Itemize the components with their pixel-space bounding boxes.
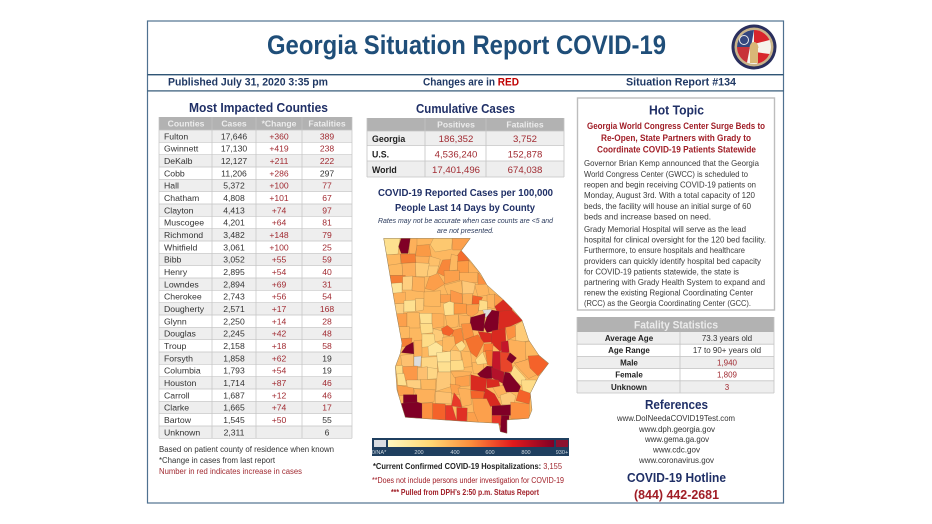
- heading: map title: [378, 187, 553, 214]
- hospitalizations note: *Current Confirmed COVID-19 Hospitalizations: 3,155: [373, 461, 562, 471]
- row: U.S.: [372, 150, 542, 160]
- row: World: 674,038: [508, 165, 542, 176]
- hot topic paragraph 1: Governor Brian Kemp announced that the Georgia: [584, 159, 759, 168]
- hotline: COVID-19 Hotline: [627, 471, 726, 485]
- row: Clarke: [164, 403, 332, 413]
- row: Dougherty: +17: [272, 304, 287, 314]
- row: Houston: Houston: [164, 378, 197, 388]
- row: Gwinnett: [164, 144, 334, 154]
- report number: Situation Report #134: [626, 76, 737, 88]
- row: Clarke: +74: [272, 403, 287, 413]
- row: female: [615, 371, 738, 380]
- row: DeKalb: DeKalb: [164, 156, 193, 166]
- row: unknown: Unknown: [611, 383, 647, 392]
- row: Whitfield: +100: [269, 242, 289, 252]
- row: Gwinnett: 17,130: [221, 144, 247, 154]
- row: Forsyth: Forsyth: [164, 353, 193, 363]
- row: Whitfield: Whitfield: [164, 242, 197, 252]
- row: Clarke: 1,665: [223, 403, 245, 413]
- heading: most impacted counties: Most Impacted Counties: [189, 100, 328, 115]
- hotline: (844) 442-2681: [634, 488, 719, 502]
- row: Unknown: 6: [325, 427, 330, 437]
- row: Cherokee: 54: [322, 292, 332, 302]
- row: Cobb: 297: [320, 168, 334, 178]
- row: Dougherty: 168: [320, 304, 334, 314]
- row: DeKalb: 12,127: [221, 156, 247, 166]
- row: Lowndes: 31: [322, 279, 332, 289]
- row: Bartow: Bartow: [164, 415, 192, 425]
- references list: www.DoINeedaCOVID19Test.com: [616, 414, 735, 423]
- row: Troup: [164, 341, 332, 351]
- hot topic headline: Re-Open, State Partners with Grady to: [601, 133, 752, 143]
- table: cumulative cases: Positives: [437, 120, 475, 130]
- row: Bibb: [164, 255, 332, 265]
- hot topic paragraph 2: Furthermore, to ensure hospitals and healthcare: [584, 246, 745, 255]
- row: Gwinnett: +419: [269, 144, 289, 154]
- row: Hall: 77: [322, 181, 332, 191]
- row: Hall: Hall: [164, 181, 179, 191]
- row: Columbia: 1,793: [223, 366, 245, 376]
- row: Henry: [164, 267, 332, 277]
- row: Fulton: Fulton: [164, 131, 188, 141]
- row: Chatham: Chatham: [164, 193, 199, 203]
- icon: state seal: [732, 24, 776, 70]
- row: Cherokee: Cherokee: [164, 292, 202, 302]
- hot topic paragraph 2: providers can quickly identify hospital bed capacity: [584, 257, 762, 266]
- row: DeKalb: +211: [270, 156, 289, 166]
- row: Cherokee: [164, 292, 332, 302]
- hot topic paragraph 2: Grady Memorial Hospital will serve as the lead: [584, 225, 746, 234]
- row: male: Male: [620, 358, 638, 367]
- hot topic paragraph 1: World Congress Center (GWCC) is scheduled to: [584, 170, 748, 179]
- row: Glynn: 2,250: [223, 316, 245, 326]
- row: age range: Age Range: [608, 346, 650, 355]
- hospitalizations note: [372, 461, 564, 497]
- table header: *Change: [262, 118, 297, 128]
- row: Georgia: 186,352: [439, 134, 473, 145]
- panel: hot topic: [578, 98, 774, 310]
- row: Unknown: Unknown: [164, 427, 200, 437]
- row: average age: 73.3 years old: [702, 334, 752, 343]
- row: Clayton: 4,413: [223, 205, 245, 215]
- row: Hall: 5,372: [223, 181, 245, 191]
- table: fatality statistics: [577, 317, 774, 393]
- heading: map title: People Last 14 Days by County: [395, 202, 535, 214]
- row: Carroll: +12: [272, 390, 287, 400]
- row: Fulton: [164, 131, 334, 141]
- row: Houston: +87: [272, 378, 287, 388]
- row: age range: 17 to 90+ years old: [693, 346, 761, 355]
- row: Troup: 58: [322, 341, 332, 351]
- row: Lowndes: 2,894: [223, 279, 245, 289]
- row: Chatham: 4,808: [223, 193, 245, 203]
- map caveat note: [378, 216, 554, 235]
- hot topic paragraph 2: hospital for clinical oversight for the 120 bed facility.: [584, 236, 766, 244]
- row: DeKalb: 222: [320, 156, 334, 166]
- table: cumulative cases: Fatalities: [506, 120, 544, 130]
- heading: references: References: [645, 397, 708, 412]
- row: Chatham: 67: [322, 193, 332, 203]
- row: male: 1,940: [717, 358, 738, 367]
- row: Fulton: +360: [269, 131, 289, 141]
- row: female: Female: [615, 371, 643, 380]
- hot topic paragraph 2: (RCC) as the Georgia Coordinating Center (GCC).: [584, 299, 751, 308]
- row: Forsyth: 1,858: [223, 353, 245, 363]
- row: Houston: [164, 378, 332, 388]
- hot topic paragraph 2: [584, 225, 766, 308]
- references list: www.dph.georgia.gov: [638, 425, 715, 434]
- map legend: 930+: [556, 450, 568, 456]
- map legend: 200: [414, 450, 424, 456]
- row: Muscogee: 4,201: [223, 218, 245, 228]
- hot topic paragraph 2: partnering with Grady Health System to expand and: [584, 278, 765, 287]
- hospitalizations note: **Does not include persons under investigation for COVID-19: [372, 476, 564, 485]
- row: Richmond: 79: [322, 230, 332, 240]
- references list: www.coronavirus.gov: [638, 456, 714, 465]
- heading: cumulative cases: Cumulative Cases: [416, 101, 515, 116]
- row: Richmond: [164, 230, 332, 240]
- row: male: [620, 358, 738, 367]
- row: U.S.: 152,878: [508, 150, 542, 160]
- row: Douglas: [164, 329, 332, 339]
- hot topic paragraph 2: for COVID-19 patients statewide, the state is: [584, 268, 739, 276]
- dark county: Whitfield area: [399, 237, 410, 253]
- row: Fulton: 17,646: [221, 131, 247, 141]
- row: Richmond: +148: [269, 230, 289, 240]
- row: Henry: Henry: [164, 267, 188, 277]
- row: Muscogee: 81: [322, 218, 332, 228]
- row: Clayton: +74: [272, 205, 287, 215]
- row: Gwinnett: 238: [320, 144, 334, 154]
- title: Georgia Situation Report COVID-19: [267, 30, 666, 60]
- row: Bartow: [164, 415, 332, 425]
- row: Whitfield: 25: [322, 242, 332, 252]
- row: unknown: 3: [725, 383, 730, 392]
- hospitalizations note: *** Pulled from DPH’s 2:50 p.m. Status Report: [391, 488, 539, 497]
- footnotes: county table: [159, 445, 334, 476]
- row: female: 1,809: [717, 371, 738, 380]
- row: Bibb: Bibb: [164, 255, 182, 265]
- row: Fulton: 389: [320, 131, 334, 141]
- row: Richmond: 3,482: [223, 230, 245, 240]
- row: Bartow: +50: [272, 415, 287, 425]
- row: Hall: +100: [269, 181, 289, 191]
- row: Georgia: Georgia: [372, 134, 405, 144]
- row: Cobb: [164, 168, 334, 178]
- map legend: 600: [485, 450, 495, 456]
- row: Lowndes: +69: [272, 279, 287, 289]
- row: Bibb: 59: [322, 255, 332, 265]
- table header: Counties: [168, 118, 205, 128]
- row: average age: [605, 334, 752, 343]
- row: Henry: 40: [322, 267, 332, 277]
- row: age range: [608, 346, 761, 355]
- row: Glynn: 28: [322, 316, 332, 326]
- table header: [168, 118, 346, 128]
- row: Lowndes: [164, 279, 332, 289]
- map legend: 800: [521, 450, 531, 456]
- row: U.S.: U.S.: [372, 150, 389, 160]
- row: Carroll: 46: [322, 390, 332, 400]
- hot topic paragraph 1: Monday, August 3rd. With a total capacity of 120: [584, 191, 755, 200]
- hot topic headline: Coordinate COVID-19 Patients Statewide: [597, 144, 756, 154]
- row: Gwinnett: Gwinnett: [164, 144, 199, 154]
- row: Glynn: +14: [272, 316, 287, 326]
- row: Clayton: [164, 205, 332, 215]
- map legend: 0/NA*: [372, 450, 387, 456]
- row: Glynn: [164, 316, 332, 326]
- hot topic paragraph 1: beds and increase based on need.: [584, 212, 711, 222]
- hot topic paragraph 1: beds, the facility will house an initial surge of 60: [584, 202, 751, 211]
- row: Columbia: [164, 366, 332, 376]
- row: Carroll: [164, 390, 332, 400]
- row: Chatham: +101: [269, 193, 289, 203]
- row: Bartow: 1,545: [223, 415, 245, 425]
- footnotes: county table: Number in red indicates increase in cases: [159, 467, 302, 476]
- table: fatality statistics: Fatality Statistics: [634, 320, 718, 332]
- map legend: 400: [450, 450, 460, 456]
- row: Cobb: 11,206: [221, 168, 247, 178]
- row: Bartow: 55: [322, 415, 332, 425]
- row: Glynn: Glynn: [164, 316, 187, 326]
- row: Lowndes: Lowndes: [164, 279, 199, 289]
- row: Henry: 2,895: [223, 267, 245, 277]
- hot topic paragraph 2: renew the existing Regional Coordinating Center: [584, 288, 753, 298]
- row: Clayton: 97: [322, 205, 332, 215]
- row: Cherokee: +56: [272, 292, 287, 302]
- row: Clarke: 17: [322, 403, 332, 413]
- row: Dougherty: Dougherty: [164, 304, 205, 314]
- row: Cherokee: 2,743: [223, 292, 245, 302]
- row: Troup: Troup: [164, 341, 187, 351]
- hotline: [627, 471, 726, 502]
- footnotes: county table: Based on patient county of residence when known: [159, 445, 334, 454]
- hot topic headline: Georgia World Congress Center Surge Beds to: [587, 121, 766, 131]
- row: Muscogee: Muscogee: [164, 218, 204, 228]
- row: Bibb: +55: [272, 255, 287, 265]
- row: Houston: 1,714: [223, 378, 245, 388]
- row: Forsyth: [164, 353, 332, 363]
- row: Troup: 2,158: [223, 341, 245, 351]
- map legend: [372, 438, 569, 456]
- row: World: World: [372, 165, 397, 175]
- row: Columbia: +54: [272, 366, 287, 376]
- row: Bibb: 3,052: [223, 255, 245, 265]
- row: World: 17,401,496: [432, 165, 480, 176]
- footnotes: county table: *Change in cases from last report: [159, 456, 276, 465]
- references list: www.gema.ga.gov: [644, 435, 709, 444]
- subheader band: [148, 74, 784, 92]
- row: Carroll: Carroll: [164, 390, 190, 400]
- row: Cobb: +286: [269, 168, 289, 178]
- row: DeKalb: [164, 156, 334, 166]
- heading: hot topic: Hot Topic: [649, 102, 704, 118]
- row: unknown: [611, 383, 730, 392]
- row: Troup: +18: [272, 341, 287, 351]
- row: Douglas: 48: [322, 329, 332, 339]
- row: Georgia: 3,752: [513, 134, 537, 145]
- row: Whitfield: 3,061: [223, 242, 245, 252]
- row: U.S.: 4,536,240: [435, 150, 477, 160]
- row: Forsyth: +62: [272, 353, 287, 363]
- row: Whitfield: [164, 242, 332, 252]
- hot topic headline: [587, 121, 766, 154]
- row: Georgia: [372, 134, 537, 145]
- row: Douglas: Douglas: [164, 329, 197, 339]
- row: average age: Average Age: [605, 334, 654, 343]
- row: Muscogee: [164, 218, 332, 228]
- report frame: [148, 21, 784, 503]
- row: Columbia: 19: [322, 366, 332, 376]
- row: Douglas: +42: [272, 329, 287, 339]
- row: Carroll: 1,687: [223, 390, 245, 400]
- references list: www.cdc.gov: [652, 446, 700, 454]
- row: Hall: [164, 181, 332, 191]
- row: Clarke: Clarke: [164, 403, 189, 413]
- map caveat note: Rates may not be accurate when case counts are <5 and: [378, 216, 554, 225]
- row: Dougherty: [164, 304, 334, 314]
- hot topic paragraph 1: reopen and begin receiving COVID-19 patients on: [584, 180, 756, 190]
- row: Chatham: [164, 193, 332, 203]
- table header: Fatalities: [308, 118, 346, 128]
- table: most impacted counties: [159, 117, 352, 438]
- table: cumulative cases: [367, 118, 564, 177]
- hot topic paragraph 1: [584, 159, 759, 222]
- row: Forsyth: 19: [322, 353, 332, 363]
- row: Muscogee: +64: [272, 218, 287, 228]
- row: Douglas: 2,245: [223, 329, 245, 339]
- row: Houston: 46: [322, 378, 332, 388]
- row: Columbia: Columbia: [164, 366, 201, 376]
- choropleth map: Georgia counties: [383, 238, 549, 434]
- row: World: [372, 165, 542, 176]
- heading: map title: COVID-19 Reported Cases per 100,000: [378, 187, 553, 199]
- row: Clayton: Clayton: [164, 205, 194, 215]
- table header: Cases: [221, 118, 247, 128]
- row: Richmond: Richmond: [164, 230, 203, 240]
- row: Dougherty: 2,571: [223, 304, 245, 314]
- row: Unknown: 2,311: [224, 427, 245, 437]
- published date: Published July 31, 2020 3:35 pm: [168, 76, 328, 88]
- changes note: Changes are in RED: [423, 76, 519, 88]
- map caveat note: are not presented.: [437, 226, 494, 235]
- row: Unknown: [164, 427, 330, 437]
- references list: [616, 414, 735, 465]
- row: Henry: +54: [272, 267, 287, 277]
- row: Cobb: Cobb: [164, 168, 185, 178]
